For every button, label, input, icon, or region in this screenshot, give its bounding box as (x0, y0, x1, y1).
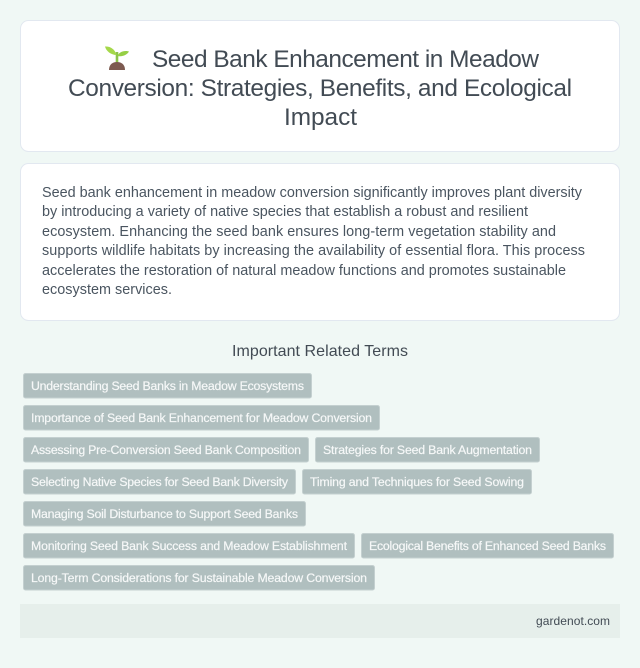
heading: important related terms: Important Related Terms (232, 343, 408, 360)
description text: ecosystem services. (42, 282, 172, 298)
description text: Seed bank enhancement in meadow conversion significantly improves plant diversity (42, 185, 583, 201)
tag group: related terms (24, 374, 614, 590)
description text: accelerates the restoration of natural meadow functions and promotes sustainable (42, 263, 566, 279)
tag: timing and techniques: Timing and Techniques for Seed Sowing (310, 475, 524, 489)
description text: ecosystem. Enhancing the seed bank ensures long-term vegetation stability and (42, 224, 556, 240)
title text: Seed Bank Enhancement in Meadow (152, 46, 539, 73)
title text: Conversion: Strategies, Benefits, and Ecological (68, 75, 572, 102)
tag: understanding seed banks (24, 374, 312, 398)
footer source: gardenot.com (536, 614, 610, 628)
icon: seedling (105, 46, 129, 70)
tag: soil disturbance (24, 502, 306, 526)
tag: augmentation strategies: Strategies for Seed Bank Augmentation (323, 443, 532, 457)
description text: supports wildlife habitats by increasing the availability of essential flora. This process (42, 243, 585, 259)
tag: importance of enhancement (24, 406, 380, 430)
tag: ecological benefits (362, 534, 614, 558)
description text (42, 185, 585, 298)
tag: assessing composition (24, 438, 308, 462)
panel: description card (20, 164, 620, 320)
tag: timing and techniques (302, 470, 532, 494)
tag: importance of enhancement: Importance of Seed Bank Enhancement for Meadow Conversion (31, 411, 372, 425)
tag: augmentation strategies (316, 438, 540, 462)
tag: soil disturbance: Managing Soil Disturbance to Support Seed Banks (31, 507, 298, 521)
tag: monitoring success: Monitoring Seed Bank Success and Meadow Establishment (31, 539, 348, 553)
tag: assessing composition: Assessing Pre-Conversion Seed Bank Composition (31, 443, 301, 457)
footer bar (20, 604, 620, 638)
tag: monitoring success (24, 534, 354, 558)
panel: title card (20, 20, 620, 152)
title text: Impact (284, 104, 357, 131)
tag: native species (24, 470, 296, 494)
tag: long-term considerations (24, 566, 374, 590)
tag: understanding seed banks: Understanding Seed Banks in Meadow Ecosystems (31, 379, 304, 393)
tag: ecological benefits: Ecological Benefits of Enhanced Seed Banks (369, 539, 606, 553)
description text: by introducing a variety of native species that establish a robust and resilient (42, 204, 528, 220)
tag: long-term considerations: Long-Term Considerations for Sustainable Meadow Conversion (31, 571, 367, 585)
tag: native species: Selecting Native Species for Seed Bank Diversity (31, 475, 289, 489)
title text (68, 46, 572, 131)
